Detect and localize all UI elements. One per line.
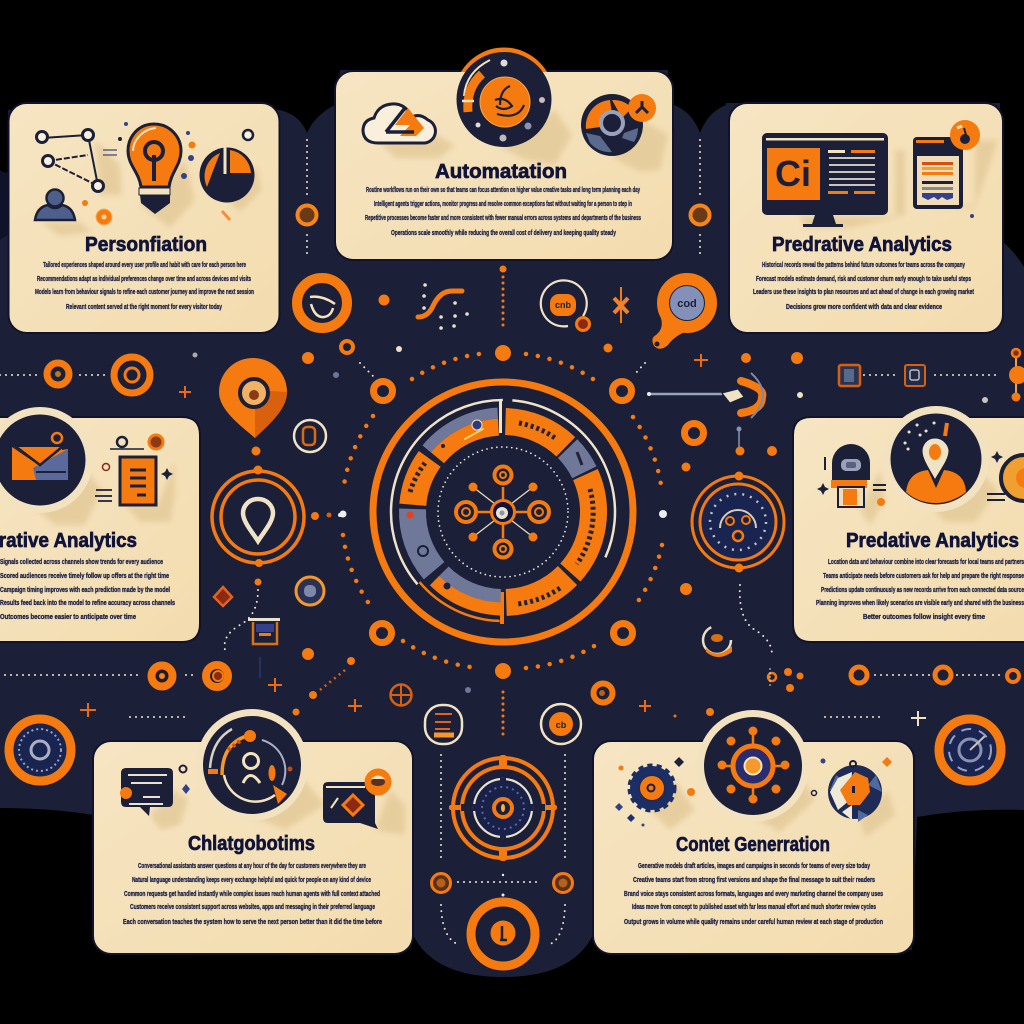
top-left and top-right small rings (298, 206, 710, 224)
icon: list ring (425, 705, 462, 744)
target with location pin (212, 446, 342, 586)
text block: personalization: Recommendations adapt as individual preferences change over time and across devices and visits (37, 274, 251, 283)
text block: personalization: Relevant content served at the right moment for every visitor today (66, 302, 223, 311)
icon: robot (817, 444, 886, 507)
text block: content generation: Brand voice stays consistent across formats, languages and every marketing channel the company uses (624, 889, 883, 898)
icon: gauge (581, 94, 656, 156)
panel: content generation (593, 710, 914, 954)
heading: automation: Automatation (435, 161, 567, 183)
icon shadows (150, 775, 405, 835)
icon shadows (650, 775, 895, 838)
icon: coin ring (541, 704, 581, 744)
heading: personalization: Personfiation (85, 234, 207, 256)
icon: cloud (363, 104, 435, 143)
icon: shield ring (296, 577, 324, 605)
heading: predictive analytics: Predrative Analytics (772, 234, 952, 256)
icon: code ring: cnb (555, 300, 571, 310)
text block: automation: Operations scale smoothly while reducing the overall cost of delivery and keeping quality steady (391, 228, 617, 237)
icon: pie chart (118, 122, 254, 220)
text block: automation: Repetitive processes become faster and more consistent with fewer manual errors across systems and departments of the business (365, 213, 641, 222)
icon: gear badge (456, 48, 552, 147)
icon: arrow with crescent (647, 373, 763, 418)
big ring bottom left (9, 719, 71, 781)
icon: orbit ring (297, 278, 347, 328)
text block: left: Scored audiences receive timely follow up offers at the right time (0, 571, 169, 580)
text block: chatbots: Each conversation teaches the system how to serve the next person better than it did the time before (123, 917, 382, 926)
background: dark edge shape (0, 170, 10, 240)
icon: map pin large (219, 358, 287, 438)
icon: tablet report (913, 120, 980, 218)
text block: personalization: Tailored experiences shaped around every user profile and habit with care for each person here (43, 260, 246, 269)
icon shadows (30, 460, 175, 525)
central hub wheel (345, 354, 661, 670)
text block: predictive (753, 260, 974, 311)
icon: person location badge (883, 406, 989, 512)
text block: chatbots (123, 861, 382, 926)
icon: orange pin tag: cod (677, 298, 697, 310)
icon: chat bubble left (120, 766, 190, 816)
text block: automation: Routine workflows run on their own so that teams can focus attention on higher value creative tasks and long term planning each day (366, 185, 640, 194)
panel: predictive analytics right (793, 406, 1024, 642)
icon: orange pin tag (652, 279, 711, 349)
small rings and bottom ring (432, 874, 572, 966)
icon: monitor: Ci (775, 153, 811, 194)
icon: small lock (703, 626, 732, 657)
text block: content generation: Output grows in volume while quality remains under careful human review at each stage of production (624, 917, 883, 926)
text block: content generation: Generative models draft articles, images and campaigns in seconds for teams of every size today (638, 861, 871, 870)
text block: personalization (35, 260, 254, 311)
text block: chatbots: Customers receive consistent support across websites, apps and messaging in their preferred language (130, 902, 375, 911)
icon: gear left (615, 757, 695, 826)
icon: code ring (541, 280, 590, 330)
text block: left (0, 557, 175, 621)
text block: right: Better outcomes follow insight every time (863, 612, 985, 621)
icon: person (35, 190, 112, 225)
panel: personalization (8, 103, 280, 333)
icon: light bulb (128, 124, 181, 214)
icon shadows (800, 140, 998, 228)
panel: predictive analytics left (0, 407, 200, 642)
ring nodes around hub (192, 266, 988, 693)
connector dotted lines (0, 140, 1000, 945)
text block: right (816, 557, 1024, 621)
icon: envelope badge (0, 407, 93, 513)
text block: left: Campaign timing improves with each prediction made by the model (0, 585, 170, 594)
text block: automation (365, 185, 641, 237)
text block: left: Outcomes become easier to anticipate over time (0, 612, 136, 621)
text block: chatbots: Conversational assistants answer questions at any hour of the day for customers everywhere they are (138, 861, 366, 870)
icon: hub badge (697, 710, 809, 822)
icon: assistant badge (196, 709, 308, 821)
text block: left: Signals collected across channels show trends for every audience (0, 557, 163, 566)
icon: side badge (987, 451, 1024, 501)
icon: x shuttle (614, 287, 628, 323)
heading: content generation: Contet Generration (676, 834, 830, 856)
icon: gear right (812, 757, 892, 822)
icon shadows (40, 140, 262, 236)
icon: diamond (214, 587, 232, 606)
icon: chat bubble right (323, 768, 392, 829)
target with faces (692, 472, 784, 572)
text block: chatbots: Natural language understanding keeps every exchange helpful and quick for people on any kind of device (132, 875, 371, 884)
icon: box (248, 618, 280, 678)
big ring bottom right (939, 719, 1001, 781)
text block: chatbots: Common requests get handled instantly while complex issues reach human agents with full context attached (124, 889, 380, 898)
panel: predictive analytics top (729, 103, 1003, 333)
text block: content generation: Creative teams start from strong first versions and shape the final message to suit their readers (633, 875, 875, 884)
text block: content generation: Ideas move from concept to published asset with far less manual effort and much shorter review cycles (632, 902, 876, 911)
panel: automation (335, 48, 673, 260)
icon: s-curve with dots (418, 285, 467, 328)
text block: personalization: Models learn from behaviour signals to refine each customer journey and improve the next session (35, 287, 254, 296)
icon: network (36, 130, 117, 192)
icon: cream ring (294, 420, 326, 452)
icon: document (95, 435, 173, 505)
heading: chatbots: Chlatgobotims (188, 833, 315, 855)
text block: content generation (624, 861, 883, 926)
left row rings (47, 357, 191, 398)
right mid nodes (680, 424, 777, 595)
text block: predictive: Decisions grow more confident with data and clear evidence (786, 302, 942, 311)
icon: nodes cluster (768, 668, 804, 692)
bottom rows rings (80, 648, 1019, 726)
target bottom center (449, 755, 557, 861)
icon shadows (860, 470, 998, 525)
icon shadows (380, 110, 668, 172)
icon: coin ring: cb (556, 720, 567, 730)
panel: chatbots (93, 709, 413, 954)
right side squares and node (694, 349, 1024, 402)
text block: left: Results feed back into the model to refine accuracy across channels (0, 598, 175, 607)
icon: monitor (762, 133, 888, 227)
text block: automation: Intelligent agents trigger actions, monitor progress and resolve common exceptions fast without waiting for a person to step in (374, 199, 632, 208)
